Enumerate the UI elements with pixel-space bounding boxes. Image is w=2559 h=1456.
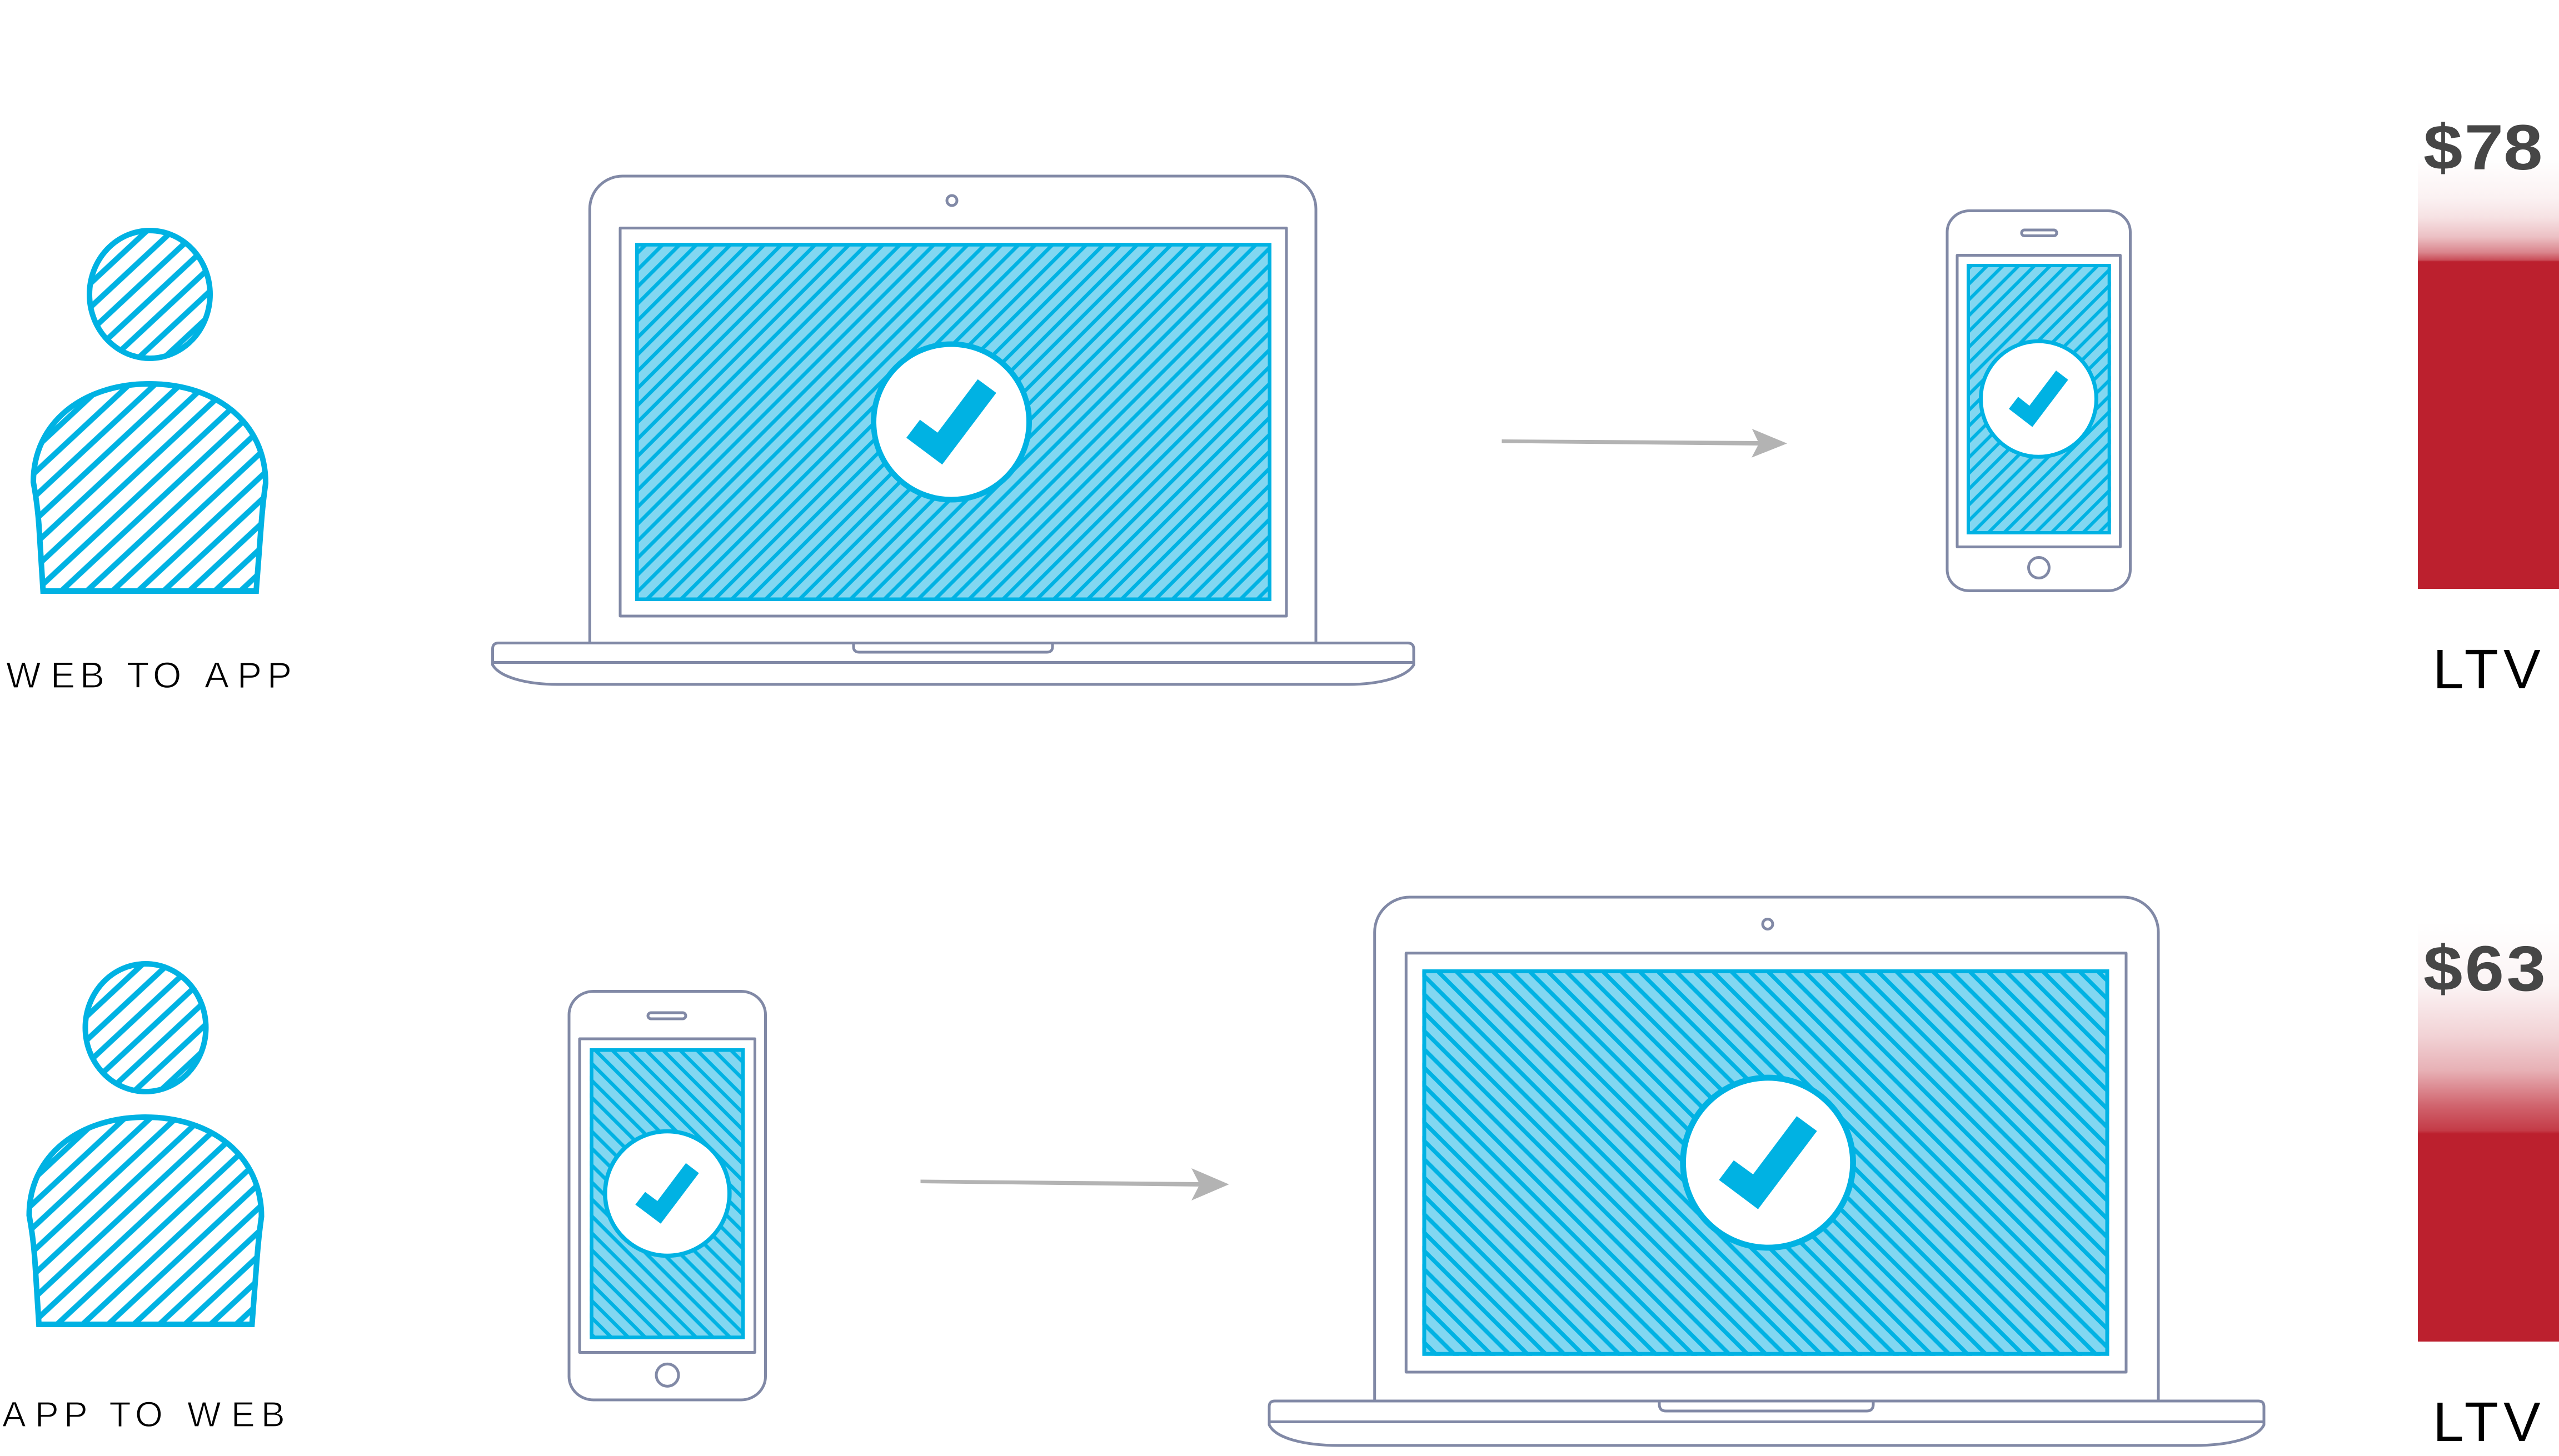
icon: person web to app — [33, 231, 266, 591]
phone body — [1947, 211, 2131, 591]
check badge — [1981, 341, 2096, 457]
laptop screen hatched — [1422, 969, 2109, 1356]
laptop bezel — [1406, 953, 2126, 1372]
phone screen hatched — [1967, 264, 2111, 534]
laptop base — [492, 643, 1414, 684]
bar chart: web to app LTV — [2418, 112, 2559, 701]
label: LTV: LTV — [2433, 638, 2541, 701]
phone bezel — [580, 1039, 755, 1352]
value: $78: $78 — [2423, 112, 2542, 183]
person body hatching — [33, 384, 266, 591]
phone home button — [656, 1364, 679, 1386]
person head hatching — [86, 964, 206, 1092]
icon: laptop source device — [492, 176, 1414, 684]
bar fade — [2418, 158, 2559, 262]
icon: laptop destination device — [1269, 897, 2264, 1445]
laptop camera — [947, 196, 957, 206]
phone home button — [2028, 558, 2049, 578]
phone speaker — [2022, 230, 2057, 236]
person body — [29, 1117, 261, 1324]
bar chart: app to web LTV — [2418, 922, 2559, 1453]
check badge — [605, 1131, 730, 1255]
arrow: web to app — [1502, 429, 1787, 458]
label: web to app: WEB TO APP — [6, 654, 292, 696]
check badge — [874, 344, 1029, 500]
check badge — [1683, 1078, 1853, 1248]
panel: web to app row — [6, 112, 2559, 701]
icon: person app to web — [29, 964, 261, 1324]
laptop screen hatched — [635, 243, 1271, 601]
person head hatching — [89, 231, 210, 358]
person head — [86, 964, 206, 1092]
panel: app to web row — [2, 897, 2559, 1453]
icon: phone source device — [569, 991, 766, 1400]
bar fade — [2418, 922, 2559, 1134]
value: $63: $63 — [2423, 933, 2546, 1004]
phone body — [569, 991, 766, 1400]
label: app to web: APP TO WEB — [2, 1394, 285, 1434]
phone speaker — [648, 1013, 686, 1019]
person body — [33, 384, 266, 591]
person head — [89, 231, 210, 358]
laptop base — [1269, 1401, 2264, 1445]
bar solid — [2418, 262, 2559, 589]
laptop bezel — [620, 228, 1286, 616]
bar solid — [2418, 1134, 2559, 1342]
person body hatching — [29, 1117, 261, 1324]
laptop camera — [1763, 919, 1773, 929]
icon: phone destination device — [1947, 211, 2131, 591]
arrow: app to web — [920, 1168, 1229, 1200]
phone screen hatched — [590, 1048, 745, 1339]
phone bezel — [1957, 256, 2121, 547]
laptop lid — [590, 176, 1316, 643]
label: LTV: LTV — [2433, 1391, 2541, 1453]
laptop lid — [1375, 897, 2158, 1401]
